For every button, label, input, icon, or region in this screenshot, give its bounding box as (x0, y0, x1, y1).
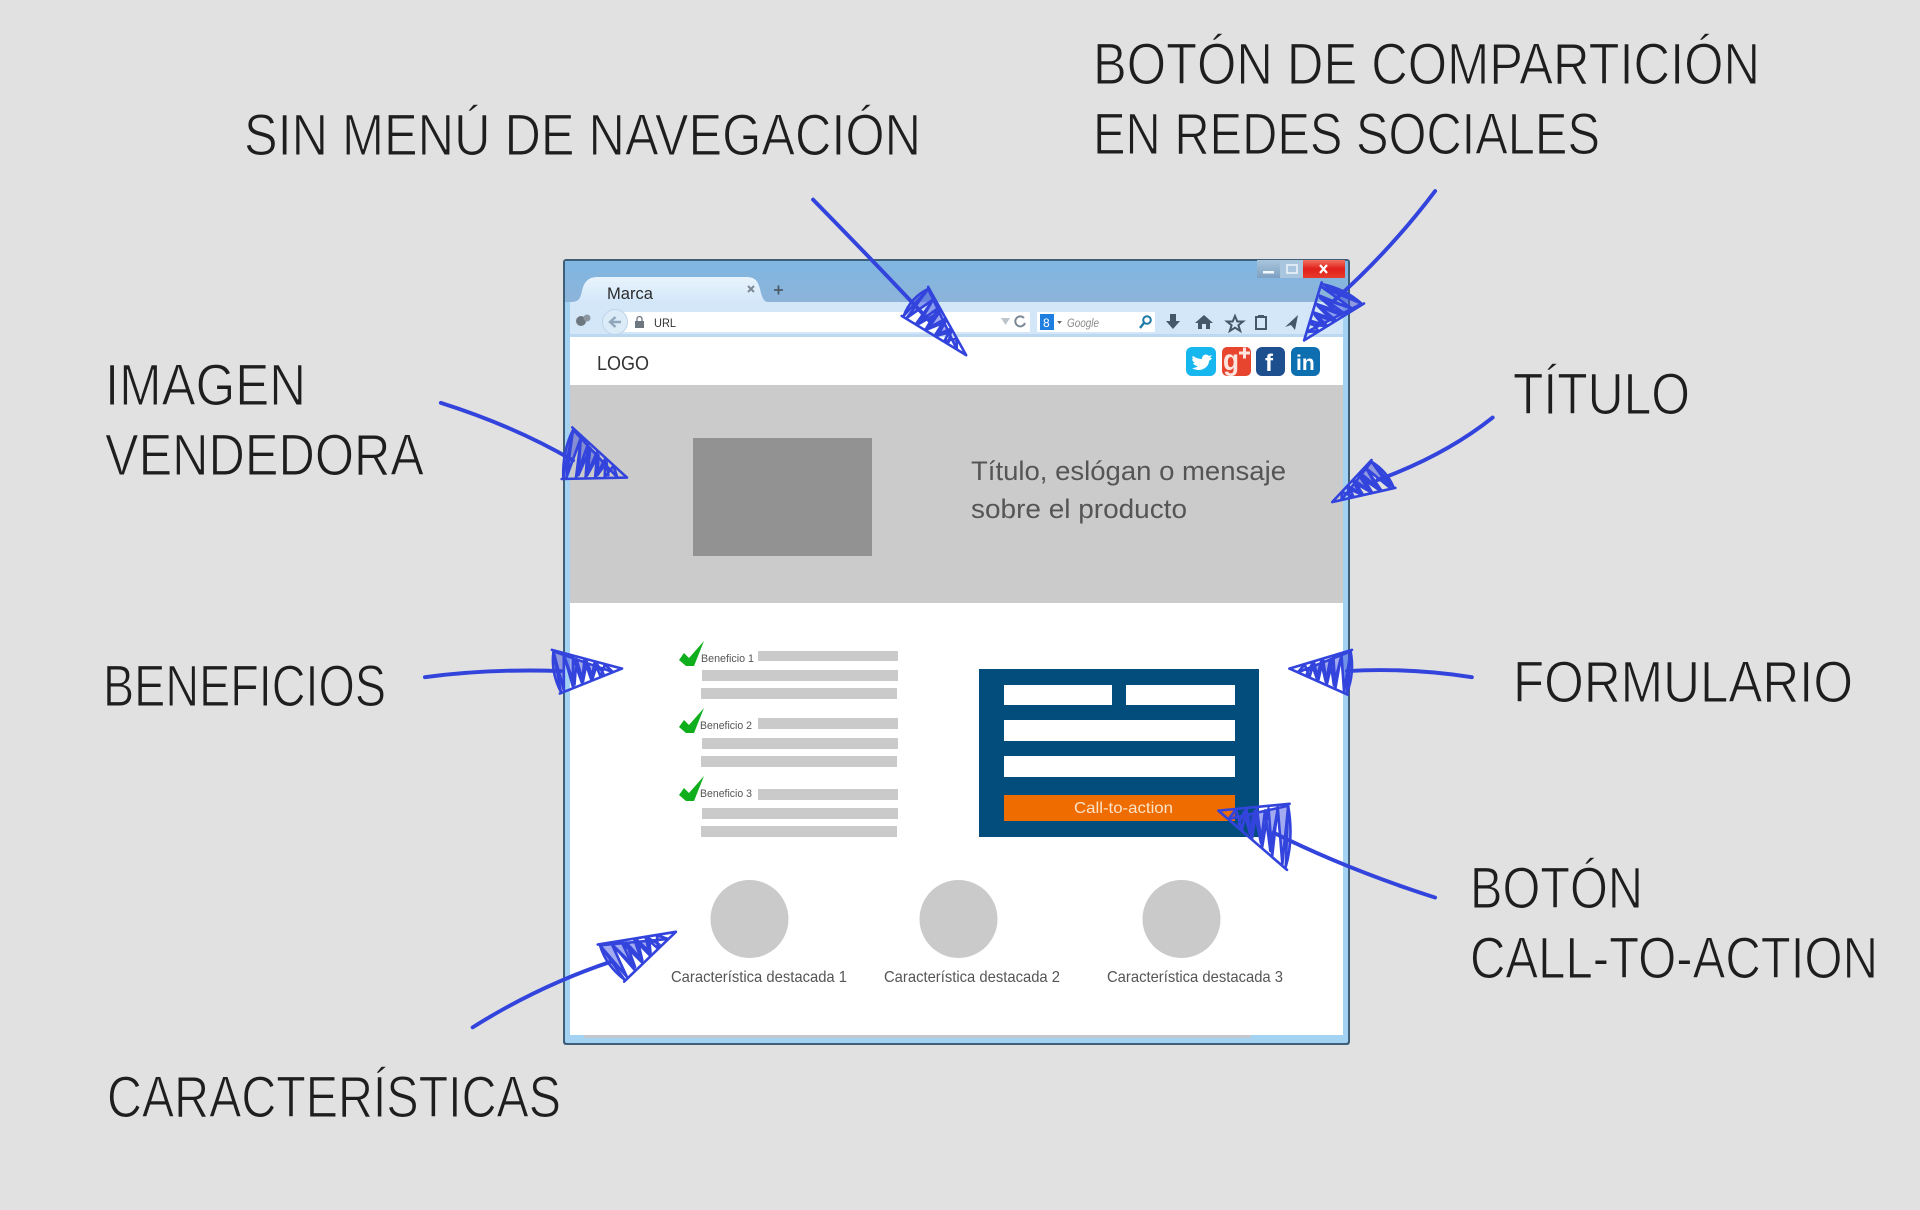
arrow: sin menú (813, 200, 969, 358)
label: botón de compartición: BOTÓN DE COMPARTICIÓN (1093, 32, 1760, 97)
page area (570, 337, 1343, 1035)
arrow: compartición (1302, 191, 1435, 343)
feature 1: Característica destacada 1 (671, 969, 847, 986)
toolbar icons (1166, 314, 1298, 331)
icon: twitter (1186, 347, 1216, 376)
feature 2: Característica destacada 2 (884, 969, 1060, 986)
icon: extensions (576, 314, 590, 326)
label: características: CARACTERÍSTICAS (107, 1065, 561, 1130)
URL bar: URL (654, 316, 676, 330)
form (979, 669, 1259, 837)
call-to-action button (1004, 795, 1235, 821)
hero title (971, 456, 1286, 524)
social buttons (1186, 344, 1320, 377)
logo: LOGO (597, 353, 649, 375)
arrows (425, 191, 1493, 1027)
arrow: características (473, 930, 680, 1027)
benefit 1: Beneficio 1 (701, 653, 754, 665)
window frame (563, 259, 1350, 1045)
hero band (570, 385, 1343, 603)
hero title: Título, eslógan o mensaje (971, 456, 1286, 486)
search box: Google (1067, 316, 1099, 330)
label: imagen vendedora: IMAGEN (105, 353, 306, 418)
icon: linkedin: in (1296, 352, 1315, 375)
feature 3: Característica destacada 3 (1107, 969, 1283, 986)
benefit 3: Beneficio 3 (700, 788, 752, 800)
URL bar (602, 310, 1030, 334)
feature 1 (671, 880, 847, 986)
toolbar (570, 302, 1343, 337)
window controls (1257, 260, 1345, 278)
benefits list (679, 641, 898, 837)
call-to-action button: Call-to-action (1074, 800, 1173, 817)
search box (1037, 312, 1155, 332)
search box: 8 (1043, 316, 1050, 330)
scrollbar (584, 1035, 1251, 1038)
icon: facebook: f (1265, 350, 1274, 377)
label: beneficios: BENEFICIOS (103, 654, 386, 719)
label: título: TÍTULO (1513, 362, 1690, 427)
feature 3 (1107, 880, 1283, 986)
benefit 3 (679, 776, 898, 837)
arrow: título (1329, 418, 1493, 504)
label: imagen vendedora: VENDEDORA (105, 423, 424, 488)
label: formulario: FORMULARIO (1513, 650, 1853, 715)
benefit 2: Beneficio 2 (700, 720, 752, 732)
label: botón de compartición (1093, 32, 1760, 167)
arrow: formulario (1286, 650, 1472, 695)
feature 2 (884, 880, 1060, 986)
benefit 2 (679, 708, 898, 767)
browser tab: Marca (607, 284, 654, 303)
label: sin menú de navegación: SIN MENÚ DE NAVEGACIÓN (244, 103, 921, 168)
label: botón de compartición: EN REDES SOCIALES (1093, 102, 1600, 167)
arrow: beneficios (425, 650, 626, 694)
panel: browser window (563, 259, 1350, 1045)
hero title: sobre el producto (971, 494, 1187, 524)
label: botón call-to-action (1470, 856, 1878, 991)
arrow: call-to-action (1214, 804, 1435, 898)
label: botón call-to-action: BOTÓN (1470, 856, 1643, 921)
label: imagen vendedora (105, 353, 424, 488)
hero image placeholder (693, 438, 872, 556)
icon: google plus: g (1223, 344, 1239, 377)
benefit 1 (679, 641, 898, 699)
arrow: imagen (441, 403, 630, 479)
browser tab (570, 277, 783, 303)
